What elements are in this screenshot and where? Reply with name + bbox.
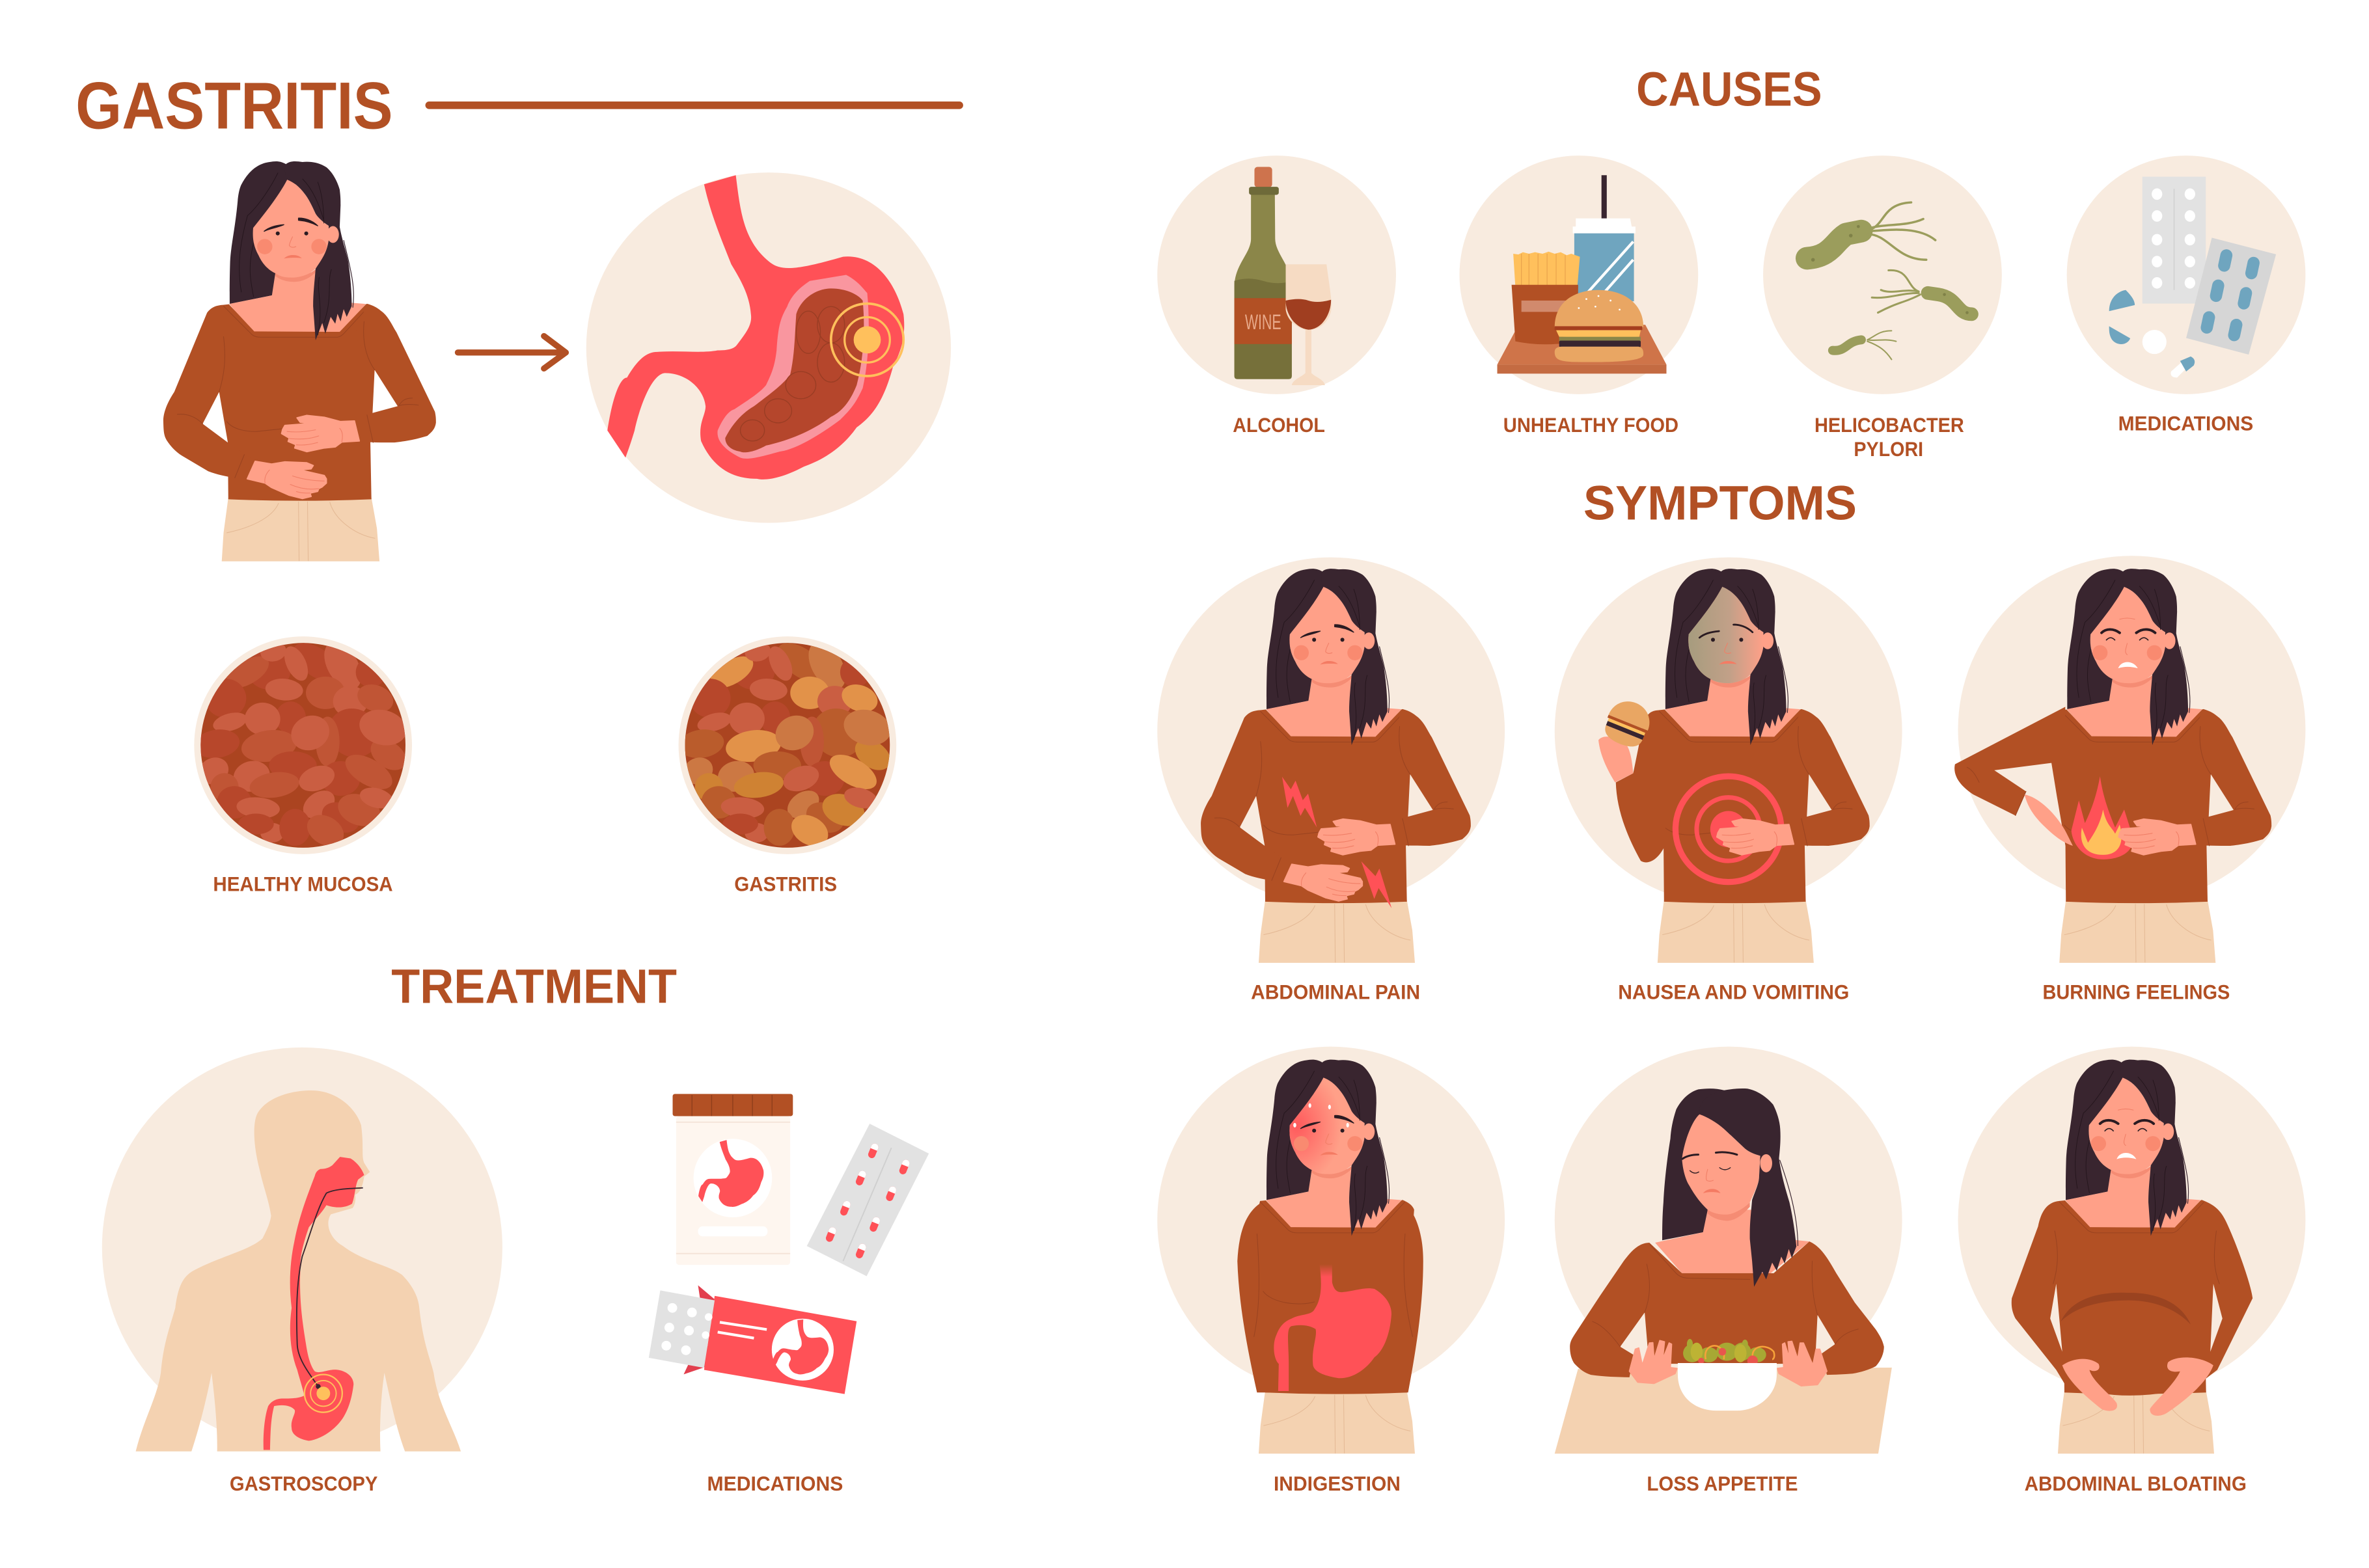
label: helicobacter pylori: PYLORI [1854, 437, 1923, 461]
label: cause medications: MEDICATIONS [2118, 412, 2253, 435]
label: helicobacter pylori [1814, 413, 1964, 461]
panel: abdominal pain [1157, 558, 1505, 963]
label: burning feelings: BURNING FEELINGS [2043, 980, 2230, 1004]
label: abdominal bloating: ABDOMINAL BLOATING [2025, 1472, 2247, 1495]
heading: treatment: TREATMENT [391, 959, 677, 1013]
label: helicobacter pylori: HELICOBACTER [1814, 413, 1964, 437]
panel: unhealthy food [1459, 155, 1698, 394]
heading: causes: CAUSES [1636, 62, 1822, 116]
panel: indigestion [1157, 1047, 1505, 1453]
arrow [458, 336, 566, 368]
label: treatment medications: MEDICATIONS [707, 1472, 843, 1495]
panel: loss appetite [1555, 1047, 1902, 1453]
panel: gastroscopy [102, 1048, 502, 1452]
panel: nausea and vomiting [1555, 558, 1902, 963]
panel: alcohol: WINE [1245, 310, 1281, 334]
label: alcohol: ALCOHOL [1233, 413, 1325, 437]
label: loss appetite: LOSS APPETITE [1647, 1472, 1798, 1495]
panel: gastritis mucosa [678, 636, 897, 854]
panel: treatment medications [649, 1094, 929, 1394]
label: abdominal pain: ABDOMINAL PAIN [1251, 980, 1420, 1004]
panel: helicobacter pylori [1763, 155, 2002, 394]
label: healthy mucosa: HEALTHY MUCOSA [213, 872, 393, 896]
title rule [429, 103, 959, 107]
panel: healthy mucosa [194, 636, 412, 854]
panel: abdominal bloating [1958, 1047, 2305, 1453]
panel: stomach close-up [586, 172, 951, 523]
label: gastritis: GASTRITIS [734, 872, 837, 896]
title: GASTRITIS [75, 68, 393, 142]
panel: alcohol [1157, 155, 1396, 394]
panel: burning feelings [1954, 556, 2305, 963]
label: nausea and vomiting: NAUSEA AND VOMITING [1618, 980, 1849, 1004]
label: indigestion: INDIGESTION [1274, 1472, 1401, 1495]
figure: woman holding stomach [163, 161, 436, 561]
panel: cause medications [2067, 155, 2305, 394]
label: unhealthy food: UNHEALTHY FOOD [1503, 413, 1678, 437]
heading: symptoms: SYMPTOMS [1583, 476, 1857, 530]
label: gastroscopy: GASTROSCOPY [230, 1472, 377, 1495]
